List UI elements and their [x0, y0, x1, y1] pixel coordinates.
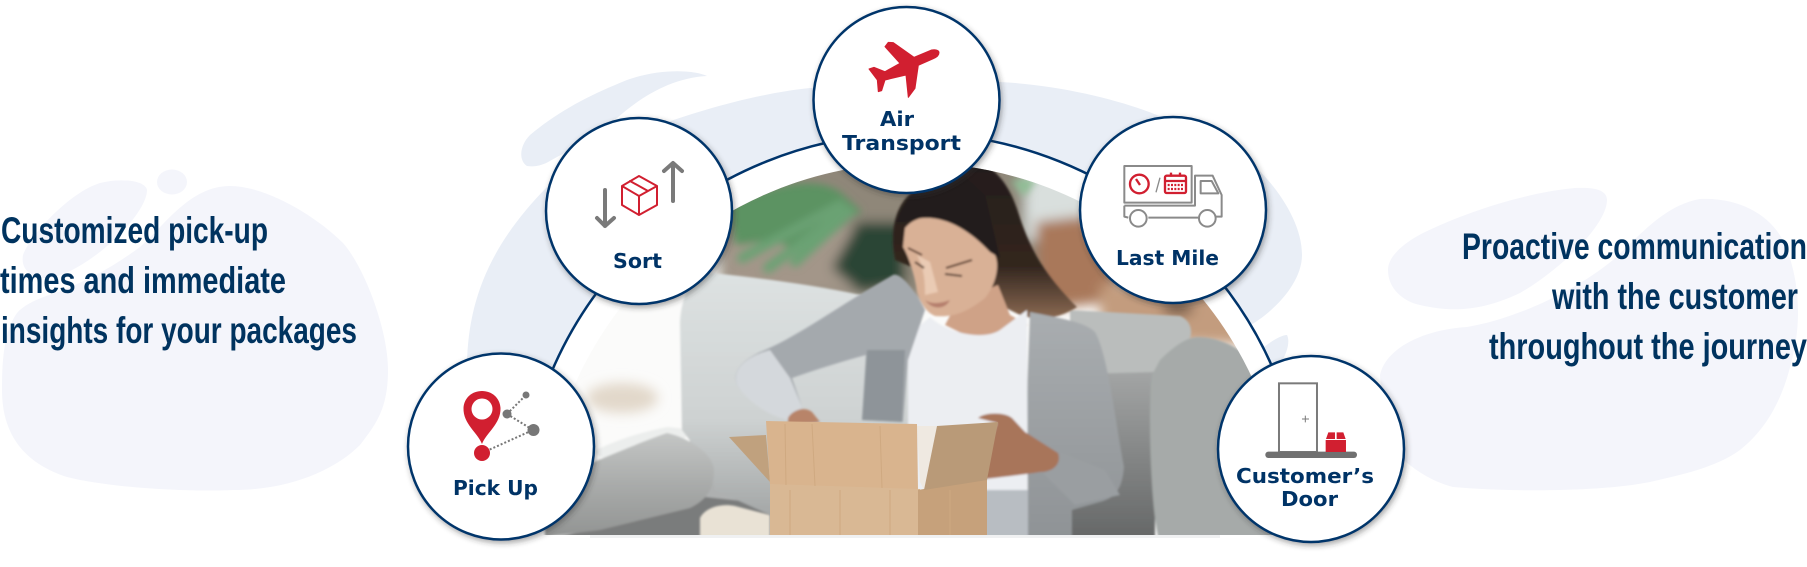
left text block [0, 210, 357, 351]
photo background: room [586, 150, 1260, 413]
photo: trousers [700, 505, 770, 537]
icon: door with parcel [1265, 383, 1357, 458]
label line two: Door [1281, 487, 1338, 511]
step: Sort [546, 118, 732, 304]
label: Air [880, 107, 914, 131]
step: Last Mile [1080, 117, 1266, 303]
faint edge under the photo [590, 535, 1220, 538]
left text block: insights for your packages [1, 310, 357, 351]
label line two: Transport [842, 131, 961, 155]
left text block: times and immediate [0, 260, 286, 301]
icon: box with sorting arrows [597, 163, 682, 226]
photo: open cardboard box [729, 421, 998, 535]
photo: woman [736, 155, 1124, 540]
right text block [1462, 226, 1807, 367]
left text block: Customized pick-up [1, 210, 268, 251]
right background blob [1380, 188, 1798, 490]
center background blob [467, 71, 1302, 400]
label: Pick Up [453, 476, 538, 500]
left background blob [2, 170, 388, 490]
step: Pick Up [408, 354, 594, 540]
arc connecting the journey steps [520, 133, 1306, 535]
icon: truck with timer and calendar [1124, 166, 1222, 227]
photo: sofa [545, 273, 1300, 537]
label: Sort [613, 249, 662, 273]
photo: woman opening a cardboard box on a sofa [540, 150, 1300, 540]
step: Customer's Door [1218, 356, 1404, 542]
label: Customer’s [1236, 464, 1374, 488]
step: Air Transport [814, 7, 1000, 193]
icon: airplane [869, 42, 939, 97]
photo background: plant fronds [730, 178, 1038, 268]
label: Last Mile [1116, 246, 1219, 270]
icon: location pin with route [463, 391, 540, 461]
